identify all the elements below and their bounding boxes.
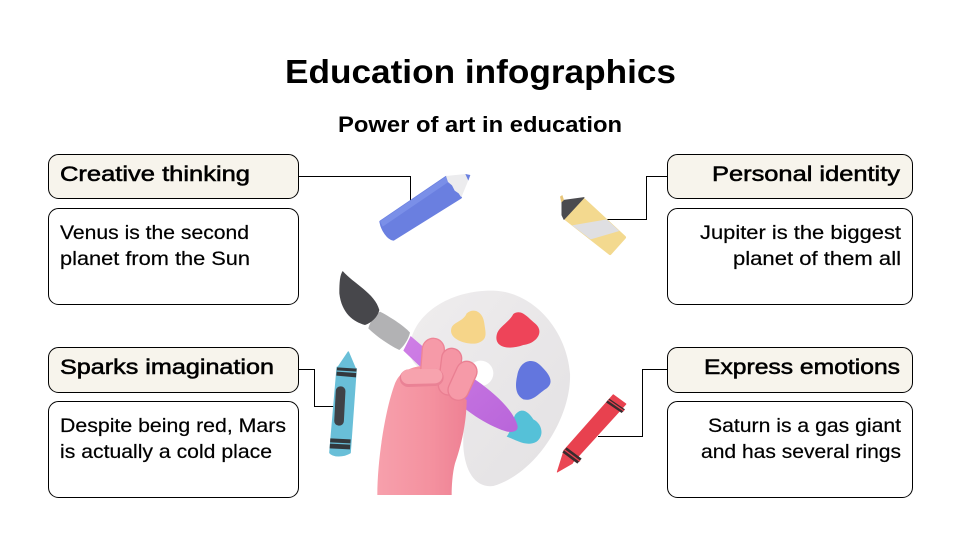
text block: sparks imagination: Despite being red, Mars	[60, 415, 286, 437]
connector: creative thinking to pencil	[299, 176, 410, 201]
text block: sparks imagination: is actually a cold place	[60, 441, 272, 463]
hand	[377, 349, 467, 495]
title: Education infographics	[285, 53, 676, 90]
heading: personal identity: Personal identity	[712, 163, 901, 186]
heading: personal identity	[668, 154, 912, 198]
connector: personal identity to highlighter	[606, 176, 667, 220]
icon: blue pencil	[380, 174, 470, 239]
text block: express emotions: and has several rings	[701, 441, 901, 463]
brush handle	[403, 336, 518, 432]
panel: express emotions	[668, 348, 912, 498]
brush bristles	[339, 271, 379, 325]
text block: sparks imagination	[48, 402, 298, 498]
text block: creative thinking: planet from the Sun	[60, 248, 250, 270]
heading: sparks imagination	[48, 348, 298, 392]
brush ferrule	[368, 312, 410, 350]
text block: express emotions: Saturn is a gas giant	[708, 415, 902, 437]
text block: creative thinking	[48, 208, 298, 304]
heading: creative thinking	[48, 154, 298, 198]
subtitle: Power of art in education	[338, 112, 622, 137]
heading: creative thinking: Creative thinking	[60, 163, 250, 186]
icon: teal crayon	[330, 352, 357, 456]
panel: sparks imagination	[48, 348, 298, 498]
icon: yellow highlighter	[560, 195, 624, 253]
palette	[409, 291, 570, 486]
text block: personal identity: planet of them all	[733, 248, 901, 270]
paint blobs	[451, 311, 551, 444]
panel: creative thinking	[48, 154, 298, 304]
heading: sparks imagination: Sparks imagination	[60, 356, 274, 379]
heading: express emotions: Express emotions	[704, 356, 900, 379]
panel: personal identity	[668, 154, 912, 304]
text block: express emotions	[668, 402, 912, 498]
text block: creative thinking: Venus is the second	[60, 222, 249, 244]
text block: personal identity: Jupiter is the biggest	[700, 222, 902, 244]
connector: sparks imagination to crayon	[299, 370, 335, 406]
heading: express emotions	[668, 348, 912, 392]
icon: red crayon	[557, 395, 626, 472]
text block: personal identity	[668, 208, 912, 304]
connector: express emotions to red crayon	[598, 370, 667, 436]
illustration: hand holding brush and palette	[339, 271, 570, 495]
